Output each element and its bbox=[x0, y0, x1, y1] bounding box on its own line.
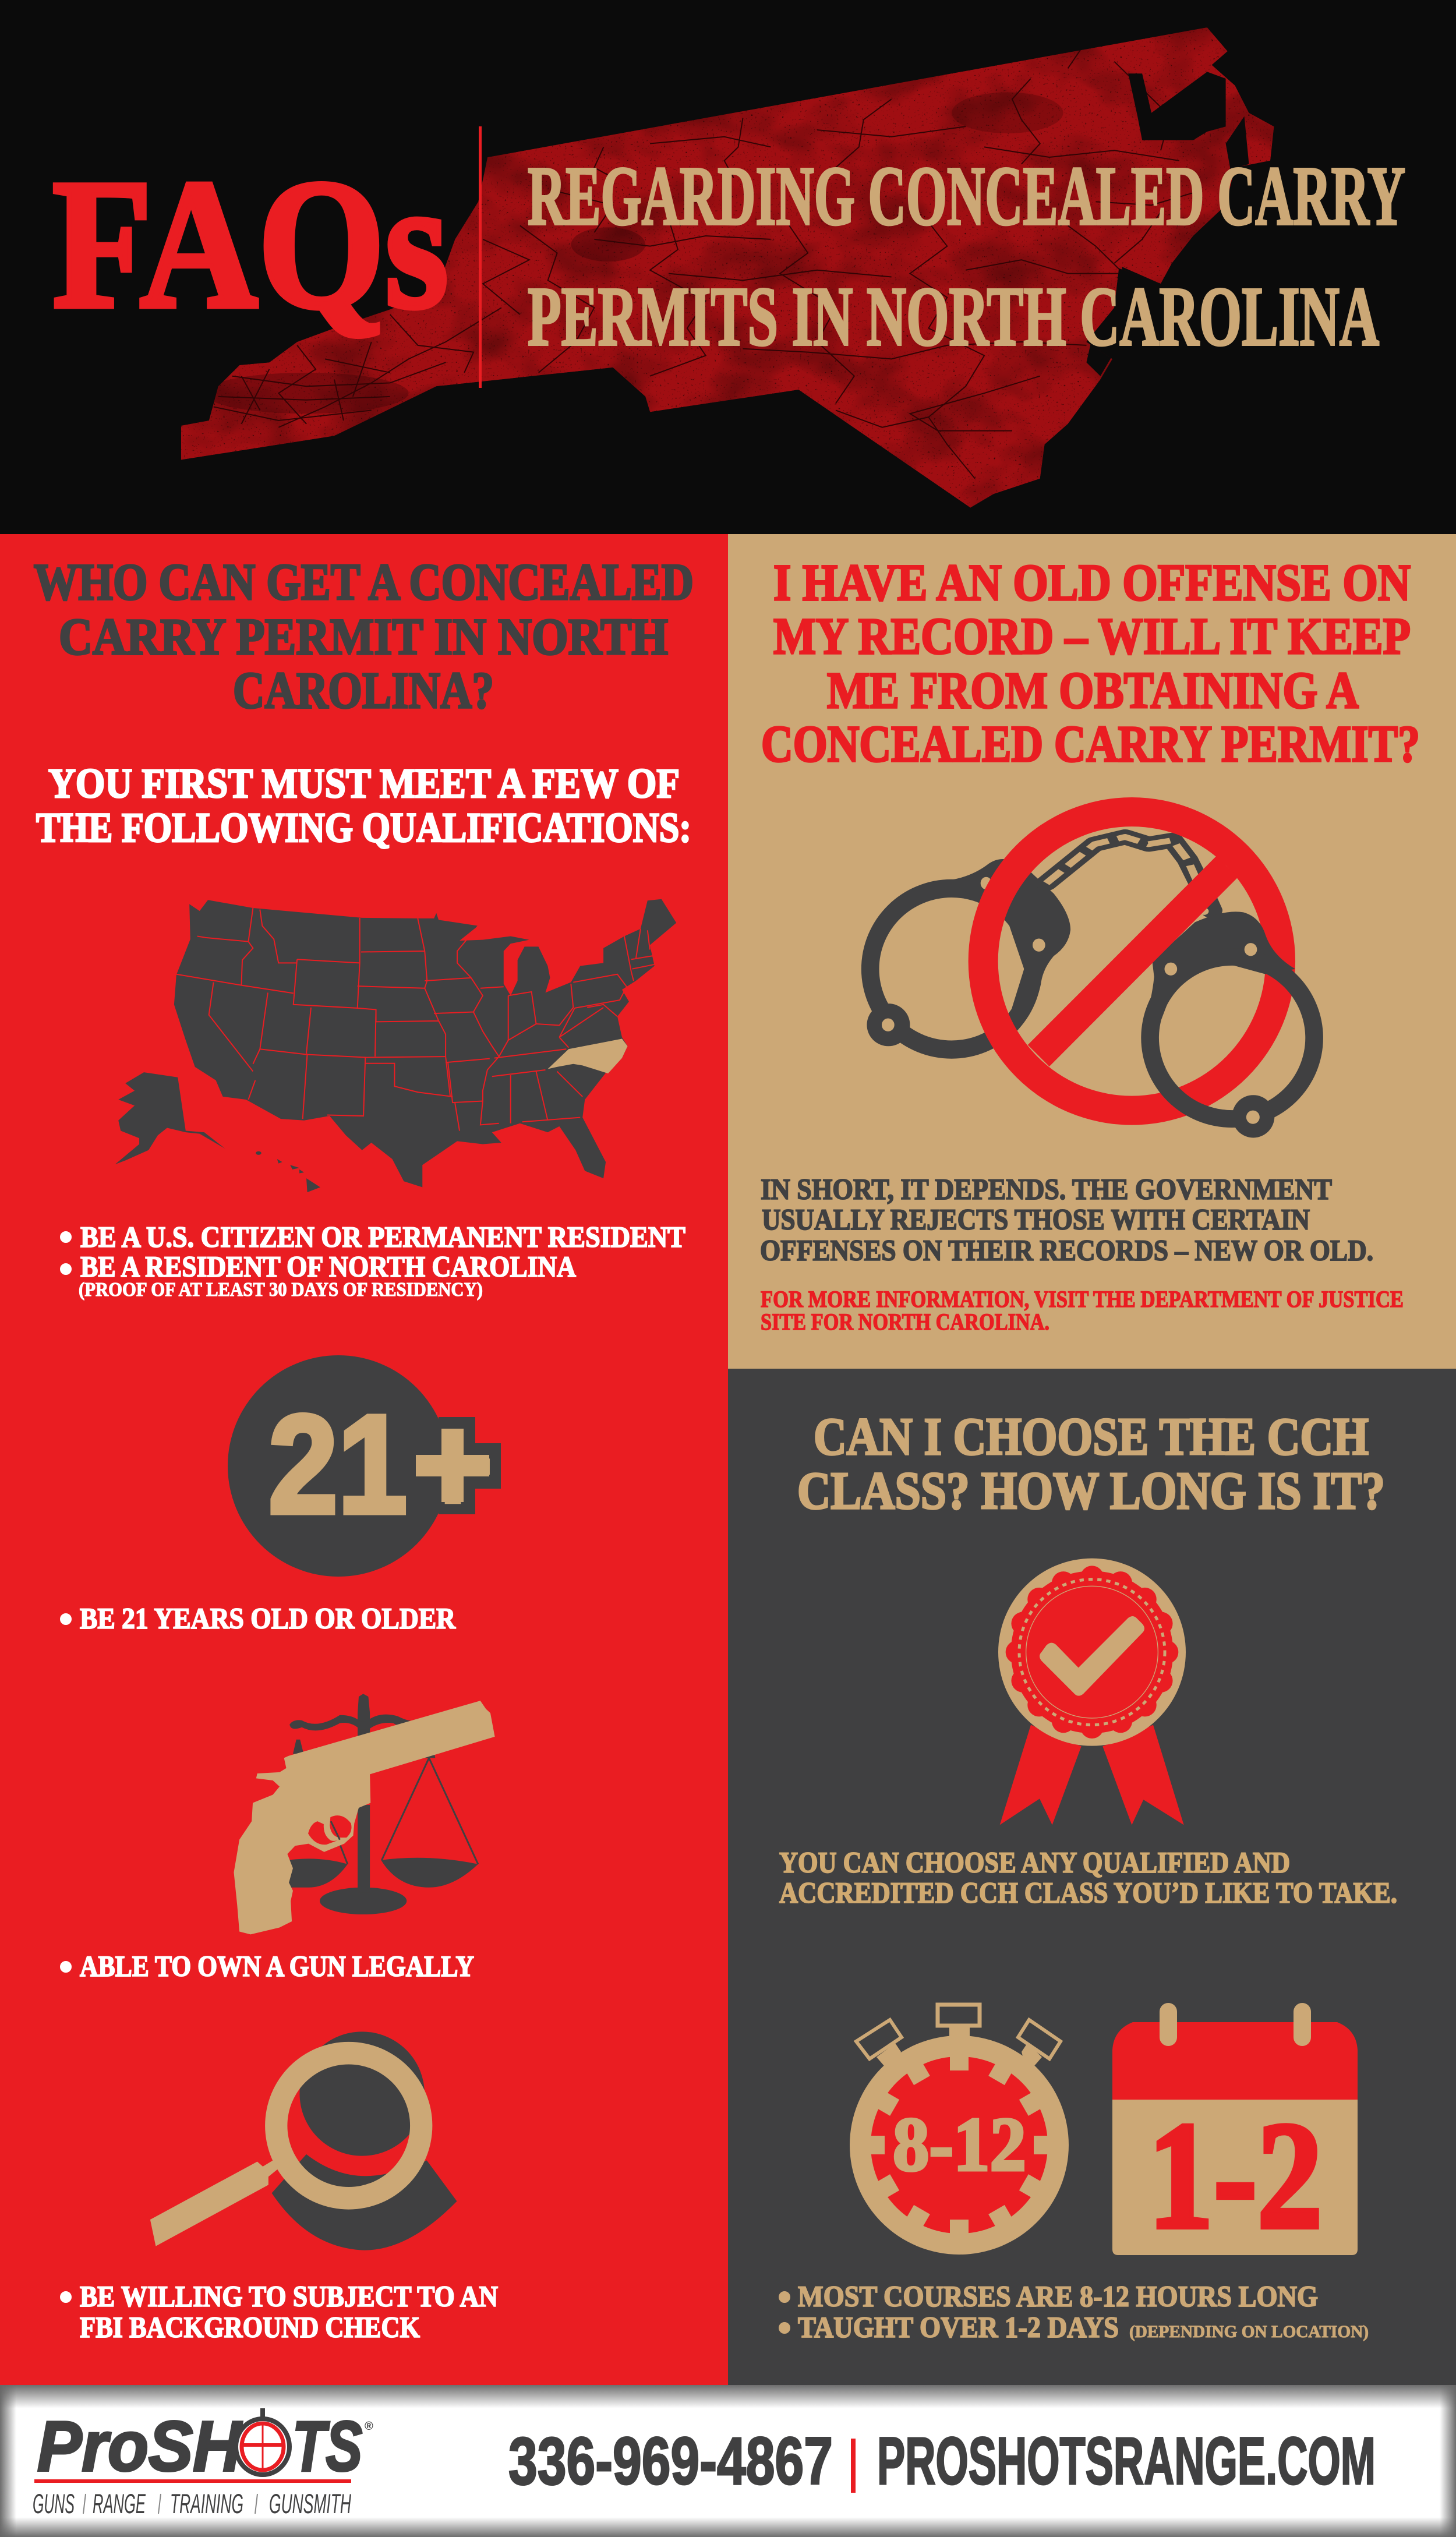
title: FAQs: FAQs bbox=[52, 142, 448, 347]
bullet: background check: FBI BACKGROUND CHECK bbox=[80, 2312, 420, 2344]
body text: it depends: IN SHORT, IT DEPENDS. THE GOVERNMENT bbox=[761, 1174, 1332, 1206]
bullets: course length: MOST COURSES ARE 8-12 HOURS LONG bbox=[798, 2281, 1318, 2313]
bullet: background check bbox=[61, 2281, 498, 2344]
logo: ProShots: GUNSMITH bbox=[269, 2488, 351, 2519]
heading: who can get a permit: CAROLINA? bbox=[233, 662, 494, 719]
bullets: citizen and resident: BE A RESIDENT OF NORTH CAROLINA bbox=[80, 1251, 576, 1284]
bullets: course length: (DEPENDING ON LOCATION) bbox=[1129, 2322, 1369, 2341]
heading: CCH class: CAN I CHOOSE THE CCH bbox=[814, 1407, 1369, 1466]
panel: CCH class bbox=[728, 1369, 1456, 2385]
icon: calendar 1-2 days bbox=[1112, 2003, 1358, 2261]
bullet: own a gun: ABLE TO OWN A GUN LEGALLY bbox=[80, 1951, 474, 1983]
panel: who can get a permit bbox=[0, 534, 728, 2385]
heading: who can get a permit: WHO CAN GET A CONCEALED bbox=[34, 554, 694, 611]
bullets: course length: TAUGHT OVER 1-2 DAYS bbox=[798, 2312, 1119, 2344]
body text: it depends: USUALLY REJECTS THOSE WITH CERTAIN bbox=[762, 1204, 1310, 1236]
logo: ProShots: TRAINING bbox=[170, 2488, 243, 2519]
logo: ProShots: ProSH bbox=[37, 2407, 243, 2486]
icon: award ribbon with check bbox=[998, 1559, 1186, 1825]
heading: old offense: ME FROM OBTAINING A bbox=[827, 662, 1359, 719]
contact: phone and website: 336-969-4867 bbox=[508, 2424, 833, 2499]
text: any qualified class: YOU CAN CHOOSE ANY QUALIFIED AND bbox=[779, 1847, 1290, 1879]
note: department of justice bbox=[761, 1286, 1404, 1335]
icon: handcuffs with prohibition sign bbox=[861, 797, 1323, 1137]
bullet: background check: BE WILLING TO SUBJECT TO AN bbox=[80, 2281, 498, 2313]
icon: 21+: + bbox=[410, 1383, 496, 1547]
icon: US map with North Carolina highlighted bbox=[115, 899, 676, 1192]
logo: ProShots bbox=[33, 2407, 373, 2519]
panel: header bbox=[0, 0, 1456, 534]
bullets: citizen and resident bbox=[61, 1221, 685, 1301]
heading: CCH class: CLASS? HOW LONG IS IT? bbox=[797, 1461, 1385, 1520]
note: department of justice: SITE FOR NORTH CAROLINA. bbox=[761, 1309, 1049, 1335]
subtitle bbox=[528, 150, 1405, 363]
divider bbox=[479, 126, 482, 388]
bullets: citizen and resident: (PROOF OF AT LEAST 30 DAYS OF RESIDENCY) bbox=[79, 1279, 483, 1301]
subheading: qualifications: THE FOLLOWING QUALIFICATIONS: bbox=[36, 804, 691, 851]
contact: phone and website bbox=[508, 2424, 1376, 2499]
icon: 21+ bbox=[228, 1355, 501, 1577]
icon: stopwatch 8-12 hours: 8-12 bbox=[893, 2101, 1026, 2187]
logo: ProShots: RANGE bbox=[93, 2488, 146, 2519]
panel: old offense bbox=[728, 534, 1456, 1369]
bullet: age: BE 21 YEARS OLD OR OLDER bbox=[80, 1603, 456, 1635]
North Carolina distressed map bbox=[181, 27, 1274, 508]
heading: old offense bbox=[761, 554, 1420, 773]
logo: ProShots: ® bbox=[365, 2420, 373, 2433]
heading: who can get a permit: CARRY PERMIT IN NORTH bbox=[59, 609, 668, 666]
icon: calendar 1-2 days: 1-2 bbox=[1148, 2091, 1323, 2261]
subheading: qualifications: YOU FIRST MUST MEET A FEW OF bbox=[48, 760, 680, 807]
logo: ProShots: GUNS bbox=[33, 2488, 75, 2519]
bullets: citizen and resident: BE A U.S. CITIZEN OR PERMANENT RESIDENT bbox=[80, 1221, 685, 1254]
icon: magnifying glass over person bbox=[150, 2031, 457, 2250]
heading: who can get a permit bbox=[34, 554, 694, 719]
panel: footer bbox=[0, 2385, 1456, 2537]
icon: 21+: 21 bbox=[268, 1386, 407, 1542]
logo: ProShots: TS bbox=[292, 2407, 362, 2486]
subheading: qualifications bbox=[36, 760, 691, 851]
icon: gun and scales bbox=[234, 1694, 495, 1934]
body text: it depends: OFFENSES ON THEIR RECORDS – NEW OR OLD. bbox=[760, 1235, 1373, 1267]
body text: it depends bbox=[760, 1174, 1373, 1267]
heading: CCH class bbox=[797, 1407, 1385, 1520]
text: any qualified class bbox=[779, 1847, 1397, 1910]
bullets: course length bbox=[779, 2281, 1369, 2344]
icon: stopwatch 8-12 hours bbox=[850, 2005, 1069, 2255]
